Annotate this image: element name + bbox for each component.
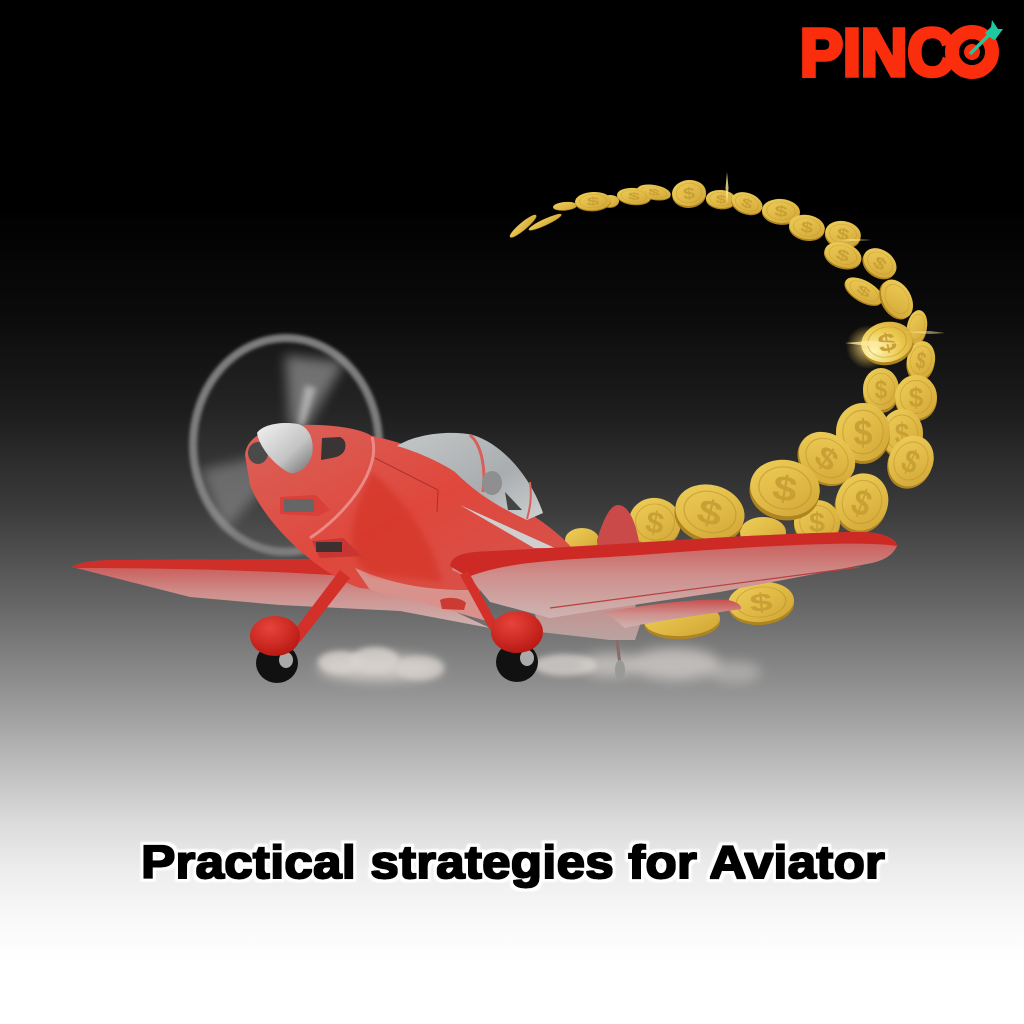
nose inlet left [248, 442, 268, 464]
coin trail: $ [643, 505, 667, 541]
left landing gear [250, 570, 350, 683]
upper air intake [280, 495, 330, 516]
coin trail: $ [647, 187, 661, 198]
sparkles [726, 172, 945, 346]
propeller [193, 338, 379, 552]
lower cowl shade [352, 472, 442, 582]
coin trail: $ [854, 282, 874, 302]
fuselage stripe [460, 505, 555, 548]
coin trail: $ [715, 193, 727, 206]
coin trail: $ [834, 246, 852, 266]
coin trail: $ [739, 195, 755, 212]
coin trail [508, 179, 942, 641]
tailplane [605, 600, 741, 628]
coin trail: $ [869, 253, 890, 275]
spinner [257, 423, 313, 473]
coin trail: $ [896, 443, 925, 482]
logo: PINCO: PINC [800, 16, 954, 90]
cowl seam [310, 437, 374, 538]
coin trail: $ [586, 195, 600, 208]
lower air intake [312, 538, 362, 558]
airplane [72, 423, 897, 683]
right wing underside [452, 532, 897, 618]
underside [355, 568, 490, 622]
coin trail: $ [895, 416, 910, 450]
tail wheel [615, 640, 625, 680]
coin trail: $ [854, 413, 872, 453]
panel seam [375, 458, 438, 512]
coin trail: $ [628, 190, 640, 203]
coin trail: $ [809, 507, 825, 538]
coin trail: $ [799, 219, 815, 237]
title: Practical strategies for Aviator [141, 836, 885, 888]
coin trail: $ [693, 492, 726, 534]
rear fuselage [520, 547, 640, 640]
coin trail: $ [748, 588, 774, 618]
right wing leading edge [450, 532, 897, 577]
coin trail: $ [682, 185, 696, 204]
nose inlet right [321, 437, 345, 460]
canopy [397, 433, 543, 520]
coin trail: $ [835, 225, 851, 245]
coin trail: $ [875, 376, 888, 405]
left wing [72, 559, 490, 628]
left wing leading edge [72, 559, 345, 576]
coin trail: $ [846, 481, 877, 525]
coin trail: $ [808, 439, 845, 479]
fuselage [245, 425, 572, 600]
wing trailing line [550, 567, 860, 608]
coin trail: $ [876, 328, 899, 359]
coin trail: $ [909, 382, 923, 413]
wing belly pod [440, 598, 466, 610]
coin trail: $ [769, 468, 800, 510]
coin trail: $ [914, 347, 928, 375]
coin trail: $ [774, 203, 788, 221]
smoke trail [318, 647, 761, 683]
tail fin [597, 505, 640, 600]
right landing gear [460, 571, 543, 682]
